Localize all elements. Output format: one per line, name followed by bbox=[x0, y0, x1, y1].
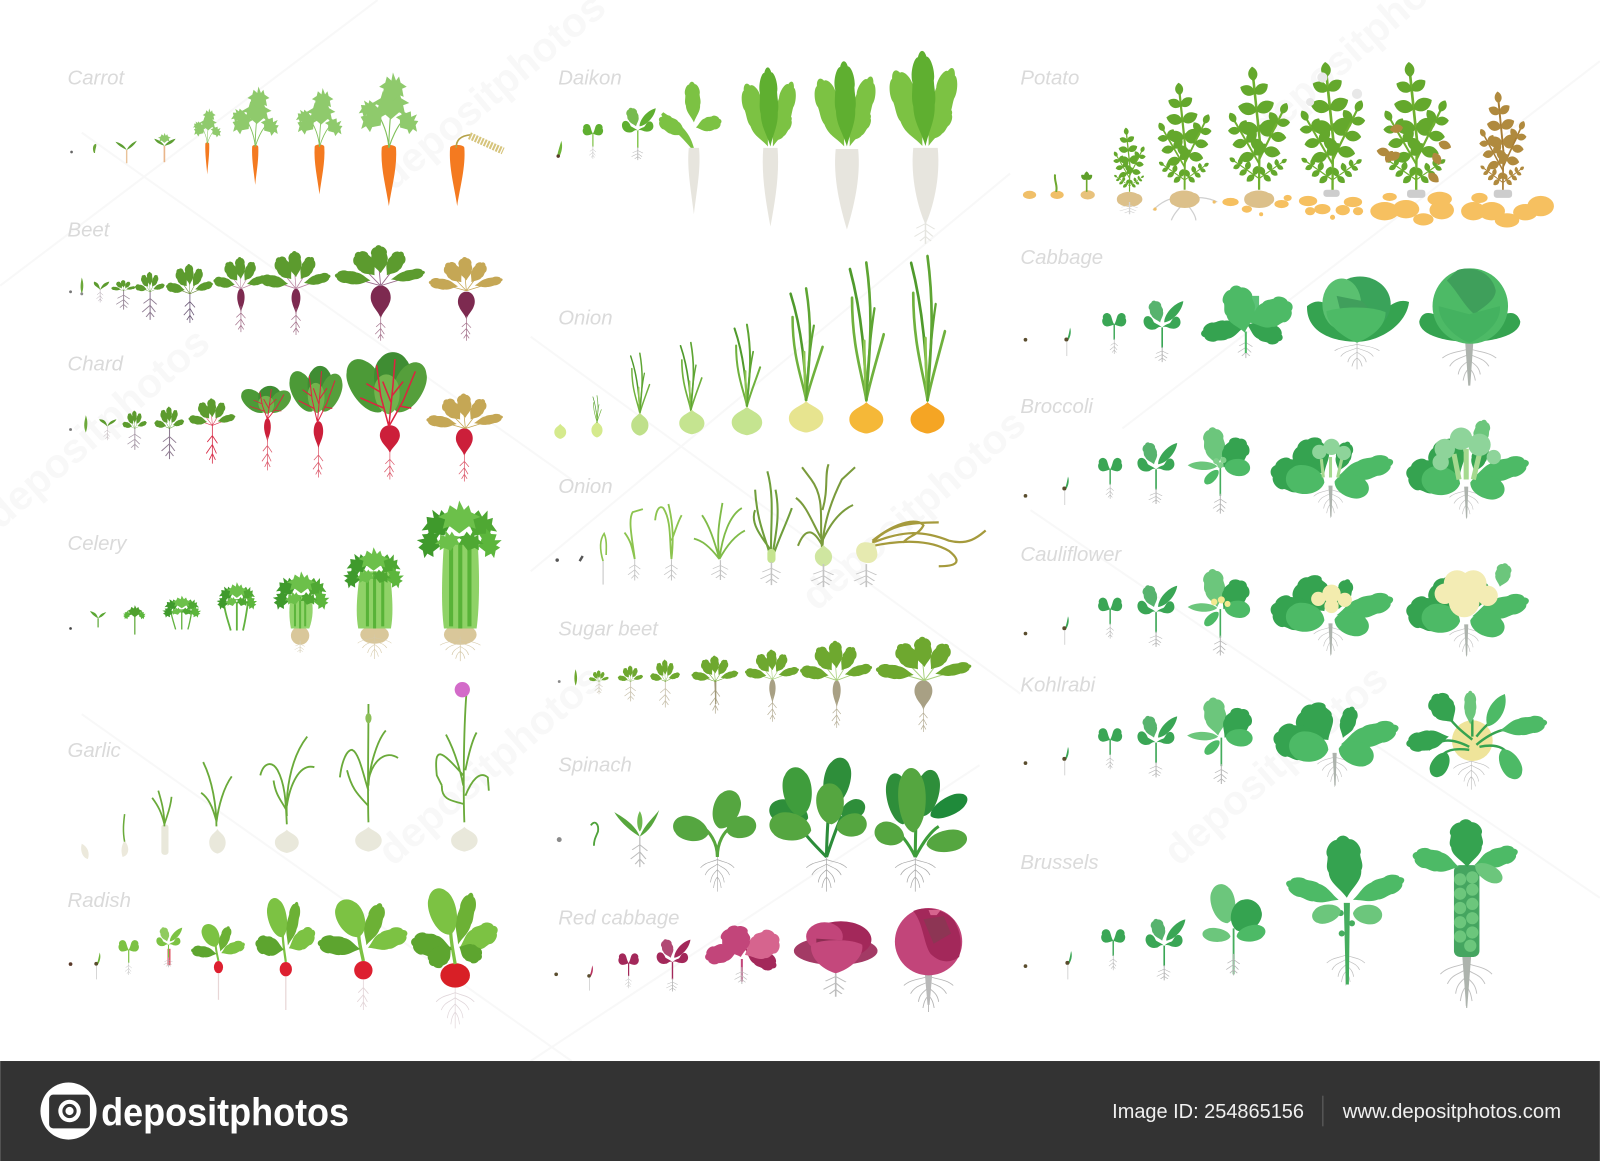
cabbage four leaf bbox=[1144, 298, 1186, 362]
potato stage 7 flowering bbox=[1286, 60, 1379, 220]
label: Broccoli: Broccoli bbox=[1020, 396, 1093, 418]
brussels four leaf bbox=[1146, 917, 1189, 980]
onion stage 6 bbox=[694, 503, 745, 580]
daikon cotyledon bbox=[583, 124, 603, 159]
chard stage 6 bbox=[188, 398, 236, 464]
carrot seed bbox=[70, 151, 73, 153]
radish sprout bbox=[94, 953, 100, 979]
broccoli four leaf bbox=[1137, 440, 1180, 504]
cabbage stage 6 bbox=[1307, 276, 1409, 369]
label: Onion: Onion bbox=[558, 307, 613, 329]
onion stage 5 bbox=[655, 504, 682, 580]
label: Cabbage: Cabbage bbox=[1020, 247, 1103, 269]
beet stage 4 bbox=[111, 280, 136, 310]
carrot true leaves bbox=[154, 133, 176, 162]
row: Potato bbox=[1020, 60, 1554, 228]
row: Red cabbage bbox=[554, 907, 962, 1012]
radish stage 8 bbox=[409, 884, 502, 1028]
onion stage 8 bbox=[796, 464, 855, 587]
broccoli stage 7 bbox=[1403, 418, 1532, 519]
label: Cauliflower: Cauliflower bbox=[1020, 544, 1122, 566]
onion stage 7 bbox=[849, 263, 884, 434]
brussels stage 6 bbox=[1283, 834, 1408, 986]
beet stage 8 bbox=[260, 250, 331, 335]
label: Kohlrabi: Kohlrabi bbox=[1020, 675, 1096, 697]
onion seed bbox=[555, 558, 559, 562]
cabbage stage 7 bbox=[1419, 268, 1520, 386]
chard stage 5 bbox=[154, 406, 184, 459]
potato stage 6 bbox=[1215, 64, 1303, 216]
spinach stage 4 bbox=[670, 786, 759, 892]
row: Chard bbox=[67, 351, 504, 482]
chard stage 10 dry bbox=[426, 393, 504, 482]
chard seedling bbox=[99, 419, 116, 440]
daikon stage 6 bbox=[809, 60, 880, 230]
garlic stage 6 bbox=[340, 704, 398, 852]
brussels stage 5 bbox=[1202, 882, 1267, 975]
beet sprout bbox=[80, 277, 83, 295]
cauliflower stage 6 bbox=[1267, 569, 1396, 656]
red cabbage stage 5 bbox=[703, 922, 785, 984]
sugar beet stage 4 bbox=[618, 665, 643, 701]
spinach sprout bbox=[591, 823, 598, 846]
sugar beet stage 6 bbox=[691, 655, 739, 714]
broccoli stage 5 bbox=[1188, 426, 1254, 514]
radish stage 5 bbox=[190, 922, 247, 1000]
beet stage 6 bbox=[166, 263, 213, 323]
onion stage 4 bbox=[625, 509, 643, 580]
row: Brussels bbox=[1020, 819, 1521, 1008]
label: Radish: Radish bbox=[67, 890, 131, 912]
celery stage 4 bbox=[161, 596, 203, 629]
cabbage stage 5 bbox=[1199, 282, 1297, 358]
daikon four leaf bbox=[622, 106, 658, 160]
spinach stage 3 bbox=[614, 810, 659, 867]
daikon sprout bbox=[556, 141, 562, 158]
label: Chard: Chard bbox=[67, 353, 124, 375]
row: Cabbage bbox=[1020, 247, 1520, 386]
sugar beet stage 7 bbox=[744, 649, 800, 722]
red cabbage sprout bbox=[587, 965, 593, 991]
red cabbage stage 7 bbox=[895, 908, 962, 1012]
beet stage 10 dry bbox=[428, 256, 504, 341]
kohlrabi sprout bbox=[1062, 747, 1069, 775]
carrot stage 9 dry bbox=[450, 135, 503, 206]
onion stage 3 bbox=[631, 353, 650, 436]
sugar beet stage 5 bbox=[650, 659, 680, 708]
chard stage 9 bbox=[339, 351, 433, 479]
cauliflower four leaf bbox=[1137, 583, 1180, 647]
onion stage 3 bbox=[601, 534, 606, 585]
row: Kohlrabi bbox=[1020, 675, 1549, 790]
potato sprout bbox=[1050, 174, 1064, 199]
cabbage sprout bbox=[1064, 328, 1071, 356]
label: Garlic: Garlic bbox=[67, 740, 121, 762]
celery stage 2 bbox=[90, 611, 106, 627]
kohlrabi seed bbox=[1024, 761, 1027, 765]
row: Garlic bbox=[67, 682, 489, 859]
potato stage 4 bbox=[1107, 126, 1152, 214]
radish four leaf bbox=[156, 926, 184, 967]
label: Potato: Potato bbox=[1020, 68, 1079, 90]
radish stage 6 bbox=[254, 894, 318, 1010]
divider bbox=[1322, 1096, 1323, 1126]
brussels stage 7 bbox=[1410, 819, 1521, 1008]
cabbage seed bbox=[1024, 338, 1027, 342]
onion stage 6 bbox=[789, 289, 823, 433]
kohlrabi stage 6 bbox=[1270, 695, 1401, 787]
image id: Image ID: 254865156 bbox=[1112, 1101, 1304, 1123]
label: Celery: Celery bbox=[67, 533, 128, 555]
garlic clove bbox=[81, 844, 89, 859]
row: Carrot bbox=[67, 68, 503, 206]
footer band bbox=[0, 1061, 1600, 1161]
chard seed bbox=[69, 428, 72, 431]
kohlrabi stage 7 bbox=[1405, 688, 1549, 790]
chard sprout bbox=[84, 415, 87, 433]
potato stage 8 bbox=[1370, 60, 1462, 225]
beet seedling bbox=[94, 282, 109, 302]
sugar beet sprout bbox=[574, 669, 577, 686]
garlic stage 7 flowering bbox=[436, 682, 489, 852]
carrot seedling bbox=[115, 141, 137, 163]
garlic stage 4 bbox=[201, 762, 232, 854]
radish seed bbox=[69, 962, 72, 966]
label: Daikon: Daikon bbox=[558, 68, 622, 90]
kohlrabi four leaf bbox=[1137, 714, 1180, 777]
beet seed bbox=[69, 290, 72, 293]
sugar beet stage 3 bbox=[589, 670, 609, 694]
brussels sprout bbox=[1065, 951, 1072, 979]
onion stage 4 bbox=[679, 343, 704, 434]
spinach stage 6 bbox=[871, 768, 971, 892]
daikon stage 7 bbox=[883, 50, 963, 244]
sugar beet stage 9 bbox=[875, 636, 972, 732]
broccoli seed bbox=[1024, 494, 1027, 498]
sugar beet stage 8 bbox=[799, 640, 873, 728]
onion set bbox=[554, 424, 566, 439]
label: Sugar beet: Sugar beet bbox=[558, 619, 659, 641]
spinach seed bbox=[557, 837, 562, 842]
carrot stage 8 bbox=[352, 72, 425, 206]
carrot stage 7 bbox=[291, 88, 348, 194]
garlic stage 3 bbox=[152, 791, 172, 855]
cauliflower sprout bbox=[1062, 616, 1069, 645]
cabbage cotyledon bbox=[1102, 313, 1126, 354]
carrot sprout bbox=[93, 144, 96, 153]
watermark layer: depositphotos bbox=[1154, 655, 1396, 874]
celery stage 7 bbox=[340, 547, 407, 659]
carrot stage 5 bbox=[190, 108, 224, 174]
potato stage 5 bbox=[1147, 81, 1223, 220]
website: www.depositphotos.com bbox=[1342, 1101, 1561, 1123]
sugar beet seed bbox=[558, 680, 561, 683]
row: Beet bbox=[67, 220, 504, 341]
carrot stage 6 bbox=[226, 87, 284, 185]
onion stage 7 bbox=[754, 471, 792, 585]
row: Sugar beet bbox=[558, 619, 972, 732]
broccoli cotyledon bbox=[1098, 458, 1122, 499]
celery seed bbox=[69, 627, 72, 630]
daikon stage 4 bbox=[655, 81, 723, 214]
potato shoot bbox=[1080, 171, 1095, 199]
red cabbage stage 6 bbox=[794, 921, 878, 997]
logo camera icon bbox=[40, 1082, 97, 1140]
watermark layer: depositphotos bbox=[792, 400, 1034, 619]
celery stage 6 bbox=[270, 571, 332, 653]
row: Daikon bbox=[556, 50, 963, 244]
chard stage 7 bbox=[236, 385, 295, 470]
kohlrabi cotyledon bbox=[1098, 728, 1122, 769]
cauliflower stage 5 bbox=[1188, 568, 1254, 655]
brussels cotyledon bbox=[1101, 929, 1125, 970]
radish cotyledon bbox=[118, 940, 139, 975]
seed tuber bbox=[1023, 191, 1036, 199]
logo wordmark: depositphotos bbox=[101, 1091, 349, 1134]
chard stage 8 bbox=[284, 365, 347, 477]
spinach stage 5 bbox=[766, 755, 869, 892]
potato stage 9 dry bbox=[1461, 90, 1554, 228]
red cabbage seed bbox=[554, 972, 558, 976]
chard stage 4 bbox=[122, 410, 147, 450]
celery stage 8 bbox=[413, 500, 506, 661]
daikon stage 5 bbox=[737, 67, 800, 226]
row: Radish bbox=[67, 884, 502, 1028]
brussels seed bbox=[1024, 964, 1027, 968]
red cabbage four leaf bbox=[657, 937, 693, 992]
onion stage 8 bbox=[911, 256, 945, 434]
onion stage 2 bbox=[591, 396, 603, 437]
radish stage 7 bbox=[316, 896, 412, 1010]
celery stage 5 bbox=[215, 582, 259, 630]
cauliflower cotyledon bbox=[1098, 598, 1122, 639]
label: Beet: Beet bbox=[67, 220, 111, 242]
garlic stage 2 bbox=[122, 814, 128, 857]
garlic stage 5 bbox=[260, 737, 314, 853]
celery stage 3 bbox=[121, 605, 147, 635]
broccoli stage 6 bbox=[1267, 431, 1396, 518]
row: Celery bbox=[67, 500, 506, 661]
broccoli sprout bbox=[1062, 477, 1069, 505]
kohlrabi stage 5 bbox=[1187, 696, 1257, 784]
label: Spinach: Spinach bbox=[558, 754, 632, 776]
onion seed germinating bbox=[580, 556, 583, 561]
beet stage 5 bbox=[135, 272, 165, 320]
row: Spinach bbox=[557, 754, 971, 892]
red cabbage cotyledon bbox=[618, 953, 639, 988]
row: Onion two bbox=[555, 464, 986, 587]
onion stage 5 bbox=[732, 325, 762, 435]
label: Red cabbage: Red cabbage bbox=[558, 907, 680, 929]
row: Cauliflower bbox=[1020, 544, 1532, 657]
cauliflower stage 7 bbox=[1403, 561, 1532, 657]
beet stage 7 bbox=[213, 256, 268, 332]
onion stage 9 lying bbox=[851, 522, 986, 587]
watermark layer: depositphotos bbox=[369, 655, 611, 874]
row: Broccoli bbox=[1020, 396, 1532, 519]
label: Brussels: Brussels bbox=[1020, 852, 1099, 874]
beet stage 9 bbox=[334, 244, 426, 341]
label: Onion: Onion bbox=[558, 476, 613, 498]
label: Carrot: Carrot bbox=[67, 68, 125, 90]
cauliflower seed bbox=[1024, 632, 1027, 635]
row: Onion one bbox=[554, 256, 945, 439]
